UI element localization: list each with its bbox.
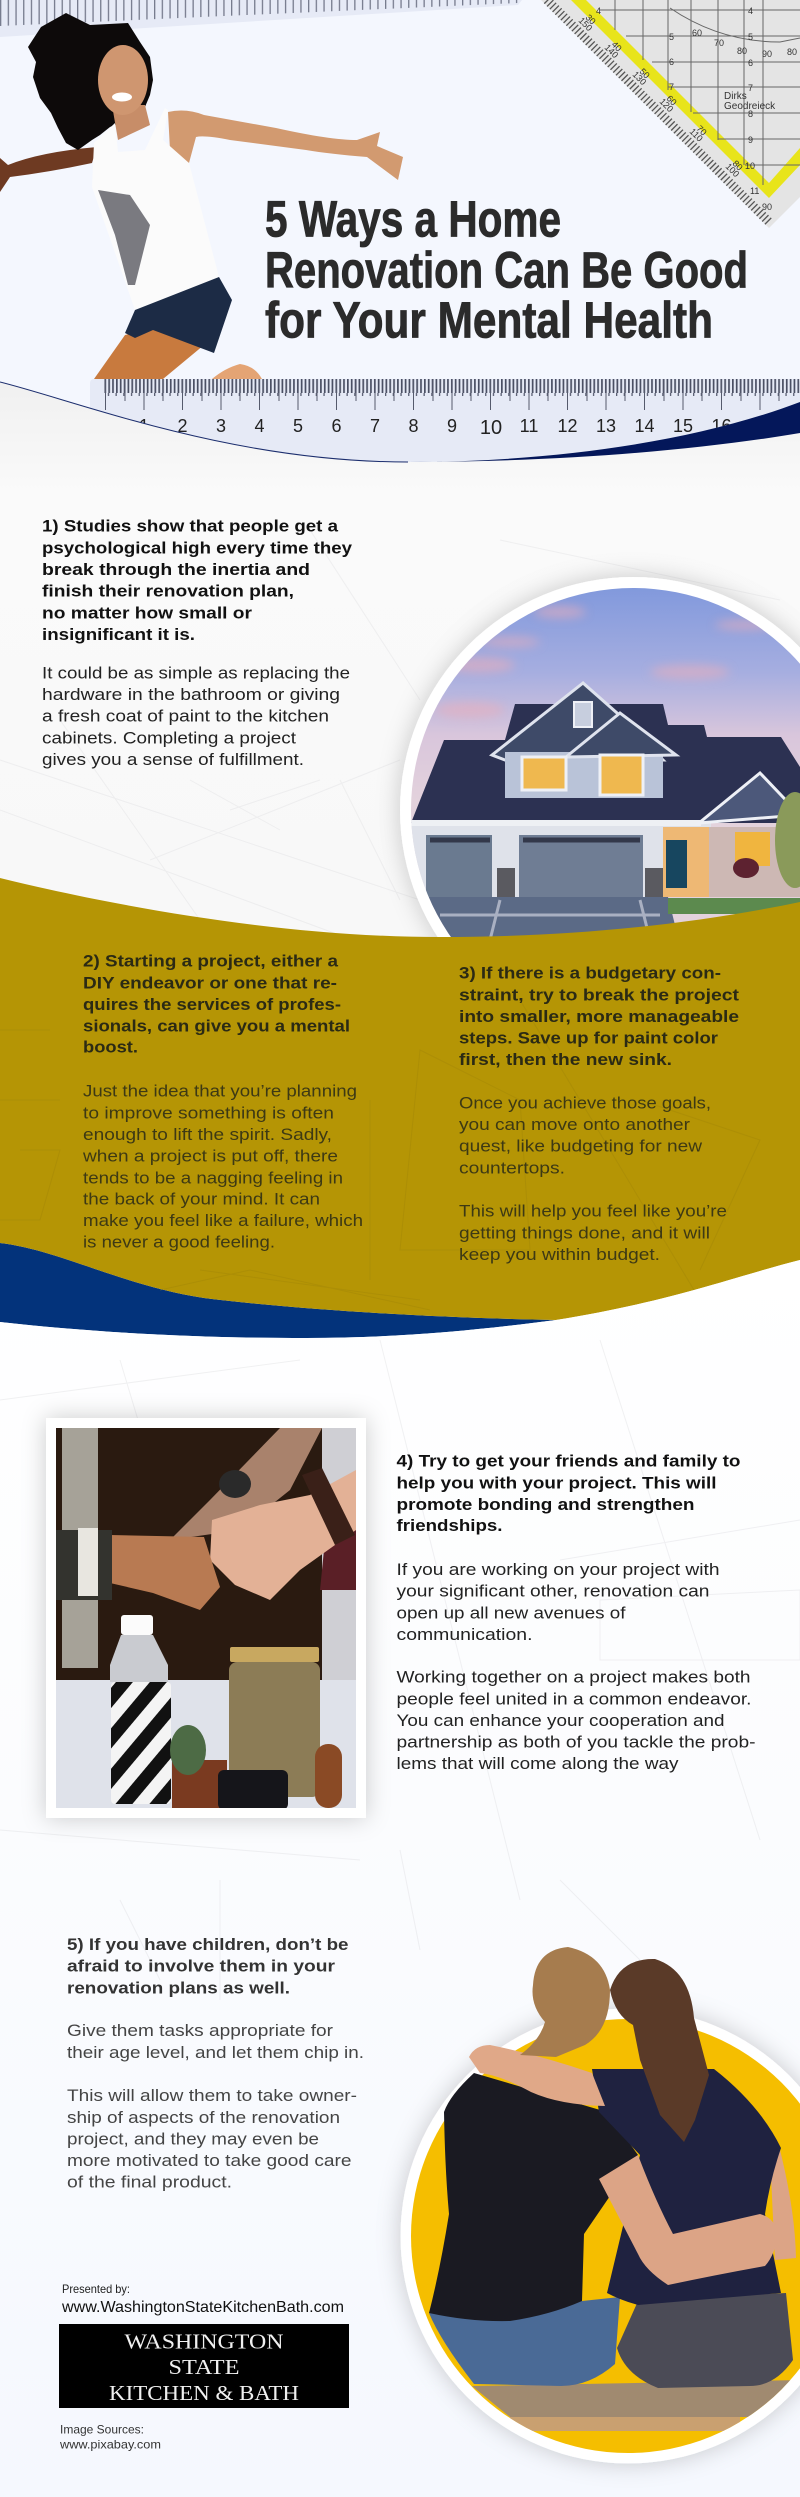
section 1 body: It could be as simple as replacing the <box>42 663 350 682</box>
left woman jeans <box>429 2297 620 2386</box>
geometry triangle ruler: 7 <box>748 83 753 93</box>
pale right column <box>322 1428 356 1708</box>
geometry triangle ruler: 5 <box>748 32 753 42</box>
section 4 heading <box>396 1452 740 1535</box>
bench lower band <box>510 2417 740 2431</box>
woman: shirt print <box>98 190 150 285</box>
porch wall <box>663 827 713 897</box>
geometry triangle ruler: 30 <box>584 12 598 26</box>
section 5 body: their age level, and let them chip in. <box>67 2043 364 2062</box>
section 5 body <box>67 2021 364 2192</box>
geometry triangle ruler: 7 <box>669 82 674 92</box>
geometry triangle ruler: 60 <box>692 28 702 38</box>
ruler numbers: 9 <box>447 416 457 436</box>
section 2 body <box>82 1082 363 1252</box>
geometry triangle ruler: 90 <box>762 49 772 59</box>
right gable <box>699 773 800 823</box>
geometry triangle ruler: 11 <box>750 186 759 196</box>
photo frame: fist bump <box>46 1418 366 1818</box>
geometry triangle ruler: 130 <box>631 69 648 87</box>
right woman shirt <box>592 2069 781 2305</box>
ruler numbers: 6 <box>331 416 342 436</box>
photo frame: house <box>400 577 800 1043</box>
jar lid <box>230 1647 319 1662</box>
section 1 heading: finish their renovation plan, <box>42 582 294 601</box>
second-floor wall <box>505 752 663 798</box>
section 3 body: This will help you feel like you’re <box>459 1202 727 1221</box>
section 5 heading: 5) If you have children, don’t be <box>67 1935 348 1954</box>
ruler numbers: 14 <box>634 416 655 436</box>
photo frame: couple <box>400 2008 800 2464</box>
top tilted ruler <box>0 0 522 37</box>
shrub <box>733 858 759 878</box>
section 4 body: lems that will come along the way <box>396 1754 679 1773</box>
woman: far foot <box>212 364 262 379</box>
clouds <box>435 606 775 718</box>
driveway reflections <box>440 900 660 940</box>
blueprint background lines upper <box>0 530 780 950</box>
geometry triangle ruler: 120 <box>658 96 675 114</box>
geometry triangle ruler: 70 <box>695 123 709 137</box>
title: for Your Mental Health <box>265 291 713 348</box>
geometry triangle ruler: 4 <box>596 6 601 16</box>
geometry triangle ruler: 60 <box>665 93 679 107</box>
geometry triangle ruler: 110 <box>688 126 705 144</box>
bottle stripes <box>111 1682 171 1804</box>
ruler numbers: 10 <box>480 417 502 439</box>
image sources <box>59 2423 161 2452</box>
geometry triangle ruler: 150 <box>577 15 594 33</box>
section 5 heading <box>67 1935 348 1997</box>
header curve and lower background <box>0 382 800 940</box>
lower wall <box>411 823 711 897</box>
right woman arm <box>770 2150 796 2260</box>
black jar lid <box>218 1770 288 1810</box>
section 3 heading: first, then the new sink. <box>459 1050 672 1069</box>
section 4 body: Working together on a project makes both <box>396 1668 750 1687</box>
section 5 body: of the final product. <box>67 2173 232 2192</box>
bottom ruler <box>90 379 800 469</box>
section 4 body: You can enhance your cooperation and <box>396 1711 724 1730</box>
title <box>265 191 748 348</box>
woman: right arm <box>168 111 403 180</box>
left woman shirt <box>429 2073 638 2321</box>
section 5 body: Give them tasks appropriate for <box>67 2021 333 2040</box>
arm around waist <box>599 2155 778 2285</box>
ruler numbers: 13 <box>596 416 616 436</box>
third hand sleeve <box>320 1530 356 1590</box>
geometry triangle ruler: 10 <box>745 161 755 171</box>
section 4 body: partnership as both of you tackle the prob- <box>396 1733 756 1752</box>
section 3 body: keep you within budget. <box>459 1245 660 1264</box>
geometry triangle ruler: 80 <box>731 158 745 172</box>
section 2 body: the back of your mind. It can <box>83 1189 320 1208</box>
ruler numbers: 1 <box>139 416 149 436</box>
section 4 body: your significant other, renovation can <box>396 1582 710 1601</box>
section 2 heading: 2) Starting a project, either a <box>83 952 339 971</box>
navy swoosh <box>408 402 800 462</box>
logo: KITCHEN & BATH <box>109 2381 299 2405</box>
section 4 body: people feel united in a common endeavor. <box>396 1689 752 1708</box>
right wing wall <box>709 827 800 897</box>
cactus <box>170 1725 206 1775</box>
woman: left arm <box>0 147 97 192</box>
water bottle neck and body <box>110 1635 168 1682</box>
section 1 body: a fresh coat of paint to the kitchen <box>42 707 329 726</box>
section 1 body: hardware in the bathroom or giving <box>42 685 340 704</box>
section 4 heading: promote bonding and strengthen <box>396 1495 694 1514</box>
section 2 heading <box>83 952 350 1057</box>
geometry triangle ruler: 100 <box>724 161 741 179</box>
section 5 heading: afraid to involve them in your <box>67 1957 335 1976</box>
water bottle cap <box>121 1615 153 1635</box>
section 4 body: open up all new avenues of <box>396 1603 626 1622</box>
section 1 heading: insignificant it is. <box>42 625 195 644</box>
geometry triangle ruler: 8 <box>748 109 753 119</box>
front gable <box>566 713 676 757</box>
section 3 body: you can move onto another <box>459 1115 690 1134</box>
woman: neck <box>112 105 150 140</box>
section 5 body: more motivated to take good care <box>67 2151 352 2170</box>
geometry triangle ruler: Geodreieck <box>724 101 776 112</box>
ruler numbers: 3 <box>216 416 226 436</box>
jumping woman <box>0 13 403 379</box>
section 1 heading: break through the inertia and <box>42 560 310 579</box>
lawn <box>668 898 800 914</box>
ruler numbers: 2 <box>177 416 188 436</box>
ruler numbers: 4 <box>254 416 265 436</box>
title: 5 Ways a Home <box>265 191 561 248</box>
woman: legs <box>94 328 204 379</box>
section 3 body: getting things done, and it will <box>459 1223 710 1242</box>
geometry triangle ruler: 5 <box>669 32 674 42</box>
tree <box>775 792 800 888</box>
geometry triangle ruler: 50 <box>638 66 652 80</box>
section 2 body: Just the idea that you’re planning <box>83 1082 357 1101</box>
ruler numbers: 15 <box>673 416 693 436</box>
image sources: www.pixabay.com <box>59 2438 161 2452</box>
section 4 body: If you are working on your project with <box>396 1560 720 1579</box>
photo: couple on bench <box>429 1947 800 2431</box>
driveway <box>428 897 674 937</box>
tattooed arm <box>170 1428 322 1540</box>
website url: www.WashingtonStateKitchenBath.com <box>61 2299 344 2316</box>
table <box>56 1680 356 1810</box>
arm over shoulder <box>469 2045 605 2106</box>
pale left column <box>62 1428 98 1668</box>
section 4 body <box>396 1560 756 1773</box>
section 3 body <box>459 1093 727 1264</box>
section 2 body: is never a good feeling. <box>83 1233 275 1252</box>
garage door windows <box>430 838 640 842</box>
section 1 heading: no matter how small or <box>42 603 252 622</box>
geometry triangle ruler: 70 <box>714 38 724 48</box>
garage door left <box>426 835 492 897</box>
geometry triangle ruler: 90 <box>762 202 772 212</box>
geometry triangle ruler <box>541 0 800 228</box>
front door <box>666 840 687 888</box>
lower page background <box>0 1260 800 2497</box>
upper watch <box>219 1470 251 1498</box>
woman: tank top <box>92 108 219 310</box>
gold panel blueprint texture <box>0 1000 760 1310</box>
right arm and fist <box>210 1470 356 1600</box>
photo: fist bump and table <box>56 1428 356 1810</box>
window left <box>522 757 566 790</box>
photo: house <box>400 580 800 950</box>
fascia <box>411 820 701 826</box>
woman: shorts <box>125 277 232 353</box>
section 3 heading <box>459 964 739 1069</box>
ruler numbers: 5 <box>293 416 303 436</box>
geometry triangle ruler: 40 <box>610 39 624 53</box>
section 1 body <box>42 663 350 769</box>
woman: smile <box>112 92 132 102</box>
section 3 heading: 3) If there is a budgetary con- <box>459 964 721 983</box>
logo: STATE <box>168 2355 240 2379</box>
left woman hair <box>520 1947 610 2057</box>
ruler numbers: 8 <box>408 416 419 436</box>
section 2 heading: quires the services of profes- <box>83 995 341 1014</box>
section 2 body: enough to lift the spirit. Sadly, <box>83 1125 332 1144</box>
geometry triangle ruler: 9 <box>748 135 753 145</box>
section 2 body: to improve something is often <box>83 1103 334 1122</box>
section 3 body: Once you achieve those goals, <box>459 1093 711 1112</box>
section 1 body: cabinets. Completing a project <box>42 728 296 747</box>
wooden stamp <box>315 1744 342 1808</box>
section 2 body: tends to be a nagging feeling in <box>83 1168 343 1187</box>
geometry triangle ruler: 80 <box>737 46 747 56</box>
woman: face <box>98 45 148 115</box>
section 3 heading: straint, try to break the project <box>459 985 739 1004</box>
section 5 body: project, and they may even be <box>67 2130 319 2148</box>
right woman jeans <box>617 2293 793 2388</box>
image sources: Image Sources: <box>60 2423 144 2437</box>
bracelets <box>56 1530 112 1600</box>
section 5 body: This will allow them to take owner- <box>67 2086 357 2105</box>
section 1 heading: 1) Studies show that people get a <box>42 517 339 536</box>
logo: WASHINGTON <box>124 2329 284 2353</box>
geometry triangle ruler: 6 <box>669 57 674 67</box>
section 4 heading: help you with your project. This will <box>396 1473 716 1492</box>
geometry triangle ruler: 140 <box>603 42 620 60</box>
section 3 heading: steps. Save up for paint color <box>459 1029 718 1048</box>
gold wave panel <box>0 878 800 1320</box>
section 5 body: ship of aspects of the renovation <box>67 2108 340 2127</box>
presented by label: Presented by: <box>62 2282 130 2296</box>
blueprint background lines lower <box>0 1340 800 2000</box>
section 1 heading: psychological high every time they <box>42 538 353 557</box>
ruler numbers: 11 <box>520 416 538 436</box>
section 2 body: when a project is put off, there <box>82 1147 338 1166</box>
section 3 body: quest, like budgeting for new <box>459 1137 703 1156</box>
left arm and fist <box>112 1535 220 1610</box>
dark watch strap <box>302 1468 355 1545</box>
woman: hair <box>28 13 153 150</box>
porch window <box>735 832 770 866</box>
dormer window <box>574 702 592 727</box>
ruler numbers <box>139 416 732 439</box>
section 4 heading: 4) Try to get your friends and family to <box>396 1452 740 1471</box>
geometry triangle ruler: 80 <box>787 47 797 57</box>
geometry triangle ruler: 6 <box>748 58 753 68</box>
section 2 heading: boost. <box>83 1038 138 1057</box>
section 3 heading: into smaller, more manageable <box>459 1007 739 1026</box>
window right <box>600 755 643 795</box>
bench <box>472 2380 800 2417</box>
gold wave shadow navy layer <box>0 1243 556 1338</box>
upper gable <box>492 683 663 760</box>
section 2 heading: sionals, can give you a mental <box>83 1017 350 1036</box>
section 3 body: countertops. <box>459 1158 565 1177</box>
cactus pot <box>172 1760 227 1810</box>
geometry triangle ruler: Dirks <box>724 91 747 102</box>
ruler numbers: 12 <box>557 416 578 436</box>
section 4 body: communication. <box>396 1625 532 1644</box>
section 2 heading: DIY endeavor or one that re- <box>83 973 337 992</box>
logo <box>59 2324 349 2408</box>
section 5 heading: renovation plans as well. <box>67 1978 290 1997</box>
jar body <box>229 1662 320 1797</box>
section 1 heading <box>42 517 353 644</box>
main roof <box>411 704 800 823</box>
section 4 heading: friendships. <box>396 1516 502 1535</box>
stone pillars <box>497 868 515 897</box>
yellow circle <box>411 2019 800 2453</box>
ruler numbers: 16 <box>711 416 732 436</box>
ruler numbers: 7 <box>370 416 380 436</box>
garage door right <box>519 835 643 897</box>
section 2 body: make you feel like a failure, which <box>83 1211 363 1230</box>
section 1 body: gives you a sense of fulfillment. <box>42 750 304 769</box>
right woman hair <box>610 1959 709 2142</box>
geometry triangle ruler: 4 <box>748 6 753 16</box>
